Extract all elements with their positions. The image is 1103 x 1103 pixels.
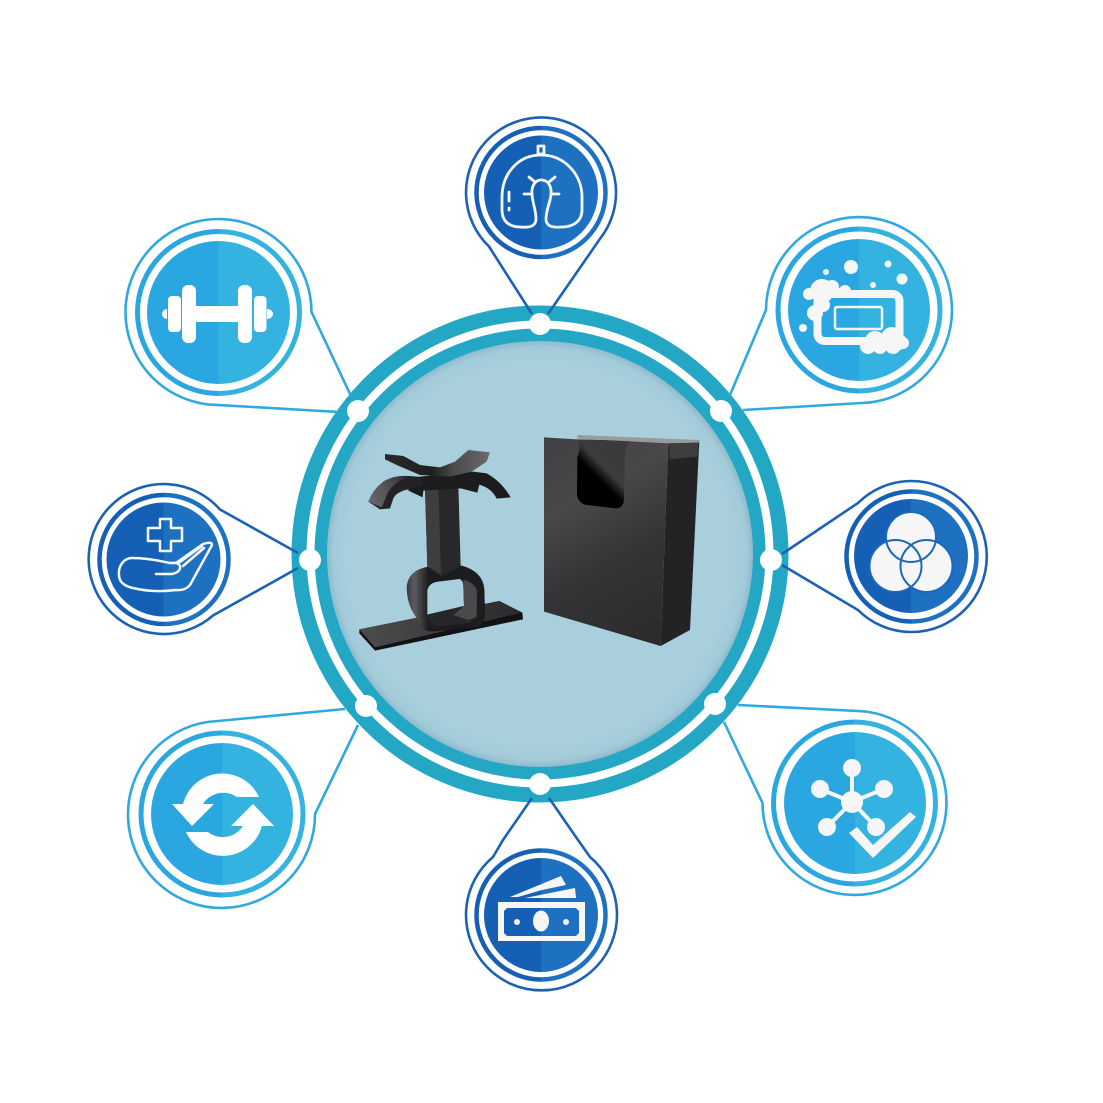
badge disc bbox=[147, 241, 290, 384]
connector nodes bbox=[299, 313, 782, 795]
icon: soap and foam bbox=[799, 260, 909, 354]
stand base bbox=[359, 601, 523, 651]
box right face bbox=[661, 441, 699, 646]
box front face bbox=[544, 437, 668, 646]
badge ring bbox=[141, 733, 303, 895]
pin outline bbox=[730, 217, 952, 410]
pin: network check bbox=[724, 705, 947, 895]
product: black stand bbox=[359, 450, 523, 651]
badge ring bbox=[846, 492, 976, 622]
badge disc bbox=[106, 502, 220, 616]
pin outline bbox=[466, 117, 616, 314]
badge ring bbox=[138, 232, 300, 394]
pin: caring hand bbox=[89, 484, 298, 634]
pin: refresh arrows bbox=[128, 709, 358, 908]
badge disc bbox=[788, 239, 930, 381]
badge disc bbox=[484, 858, 598, 972]
pin outline bbox=[724, 705, 947, 895]
pin: lungs bbox=[466, 117, 616, 314]
hub: central ring and product bbox=[299, 313, 781, 795]
product background disc bbox=[327, 341, 753, 767]
pin: banknotes bbox=[466, 798, 617, 990]
box window bbox=[577, 439, 632, 508]
stand stem bbox=[425, 485, 461, 576]
icon: three overlapping circles bbox=[870, 512, 952, 592]
badge disc bbox=[854, 499, 968, 613]
stand side arms bbox=[368, 472, 511, 509]
icon: lungs bbox=[502, 146, 582, 227]
product: black box bbox=[544, 435, 699, 646]
badge ring bbox=[778, 229, 940, 391]
pin outline bbox=[125, 219, 351, 412]
pin: venn diagram bbox=[782, 481, 987, 632]
badge ring bbox=[774, 722, 936, 884]
icon: dumbbell bbox=[162, 285, 273, 343]
inner teal ring bbox=[321, 335, 759, 773]
icon: network with check mark bbox=[811, 759, 916, 858]
pin outline bbox=[128, 709, 358, 908]
badge ring bbox=[476, 128, 606, 257]
box top lip bbox=[577, 435, 699, 443]
icon: hand with medical cross bbox=[119, 519, 212, 591]
badge disc bbox=[151, 743, 293, 885]
pin outline bbox=[782, 481, 987, 632]
outer teal ring bbox=[299, 313, 781, 795]
box corner label bbox=[669, 443, 698, 459]
badge ring bbox=[476, 850, 606, 980]
stand loop bbox=[407, 566, 485, 632]
badge ring bbox=[100, 495, 228, 624]
pin: soap bbox=[730, 217, 952, 410]
icon: refresh arrows bbox=[172, 774, 274, 856]
badge disc bbox=[484, 136, 598, 250]
pin outline bbox=[89, 484, 298, 634]
pin outline bbox=[466, 798, 617, 990]
stand saddle bbox=[385, 450, 490, 477]
badge disc bbox=[784, 732, 926, 874]
pin: dumbbell bbox=[125, 219, 351, 412]
icon: banknotes bbox=[498, 876, 585, 941]
